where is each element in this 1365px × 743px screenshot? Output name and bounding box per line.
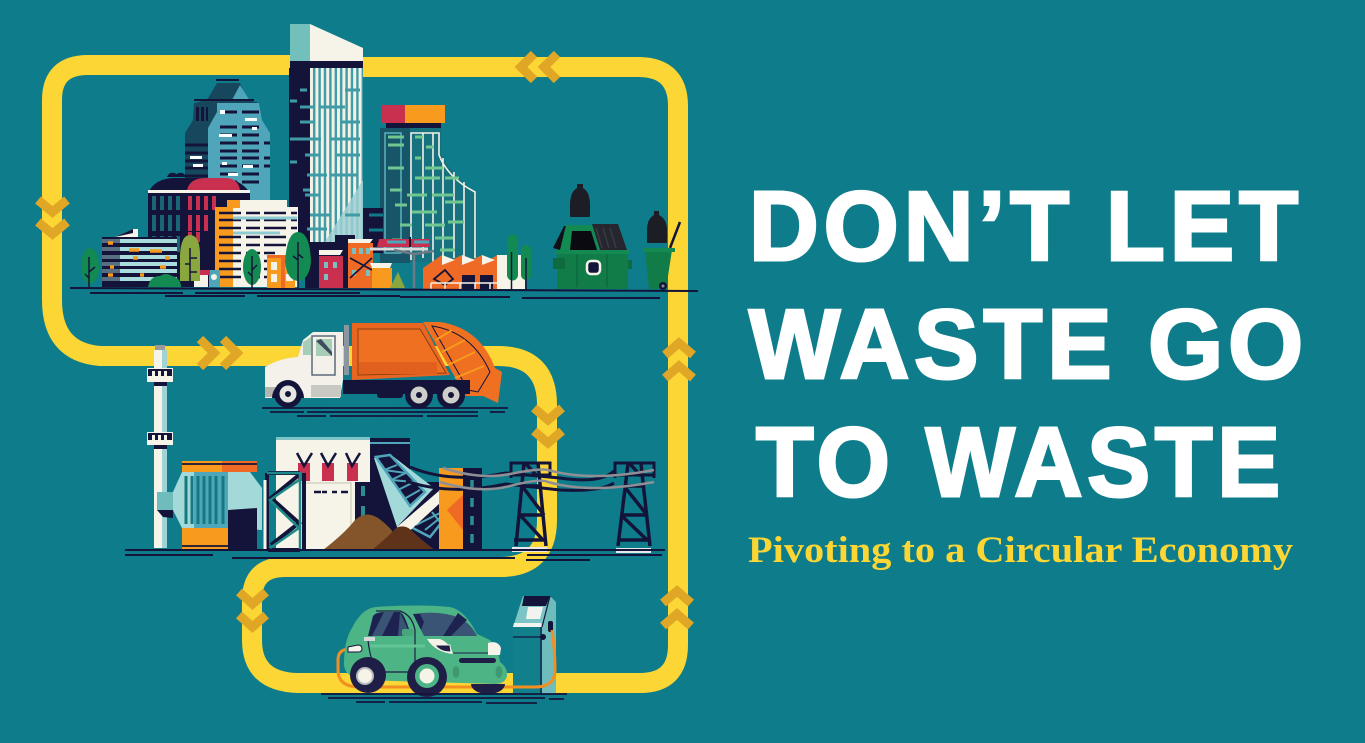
car body <box>344 606 507 684</box>
smokestack <box>147 345 173 548</box>
monorail train <box>370 237 434 288</box>
circular yellow path <box>52 65 678 683</box>
row houses <box>267 239 405 288</box>
building: blue office tower <box>185 80 270 200</box>
small house <box>188 270 220 287</box>
building: domed hall <box>148 173 250 287</box>
truck ground lines <box>262 408 508 416</box>
panel: electric car charging <box>321 596 567 703</box>
building: orange and white block <box>215 200 298 287</box>
columnar trees <box>507 234 531 290</box>
silo tower <box>439 468 482 550</box>
street ground lines <box>70 288 698 298</box>
subtitle: Pivoting to a Circular Economy <box>748 530 1294 571</box>
direction chevrons <box>38 54 693 627</box>
truck wheels <box>274 380 465 409</box>
icon: dumpster with garbage bag <box>553 184 632 289</box>
building: glass curved tower <box>380 105 477 263</box>
trees <box>81 232 311 288</box>
transformers <box>297 453 360 481</box>
panel: city skyline with waste bins <box>70 24 698 298</box>
title line 1: DON’T LET <box>749 171 1303 281</box>
panel: garbage truck <box>262 322 508 416</box>
title <box>749 171 1308 517</box>
factory <box>423 255 525 289</box>
power pylons <box>406 463 654 546</box>
car ground lines <box>321 694 567 703</box>
charging station <box>513 596 556 694</box>
icon: wheelie bin with garbage bag <box>643 211 680 290</box>
building: tall striped tower <box>289 24 363 258</box>
conveyor belt <box>374 454 457 537</box>
truck cab <box>265 332 343 398</box>
waste pile <box>323 514 435 550</box>
title line 2: WASTE GO <box>749 289 1308 399</box>
car far wheels <box>471 684 505 694</box>
grey power lines <box>440 468 654 489</box>
plant hall <box>276 437 440 550</box>
truck compactor rear <box>423 322 502 403</box>
building: dark block <box>305 208 383 288</box>
charging cable <box>338 630 555 687</box>
title line 3: TO WASTE <box>756 407 1285 517</box>
truck chassis <box>343 380 470 394</box>
pylon footings <box>512 547 651 553</box>
plant ground lines <box>125 550 665 560</box>
panel: waste-to-energy plant <box>125 345 665 560</box>
building: low striped block <box>102 229 177 287</box>
truck cargo box <box>352 323 450 380</box>
car wheels <box>350 657 447 697</box>
truck exhaust <box>344 325 349 375</box>
steel scaffold <box>265 473 304 550</box>
charging plug <box>348 645 362 652</box>
boiler unit <box>157 461 262 550</box>
